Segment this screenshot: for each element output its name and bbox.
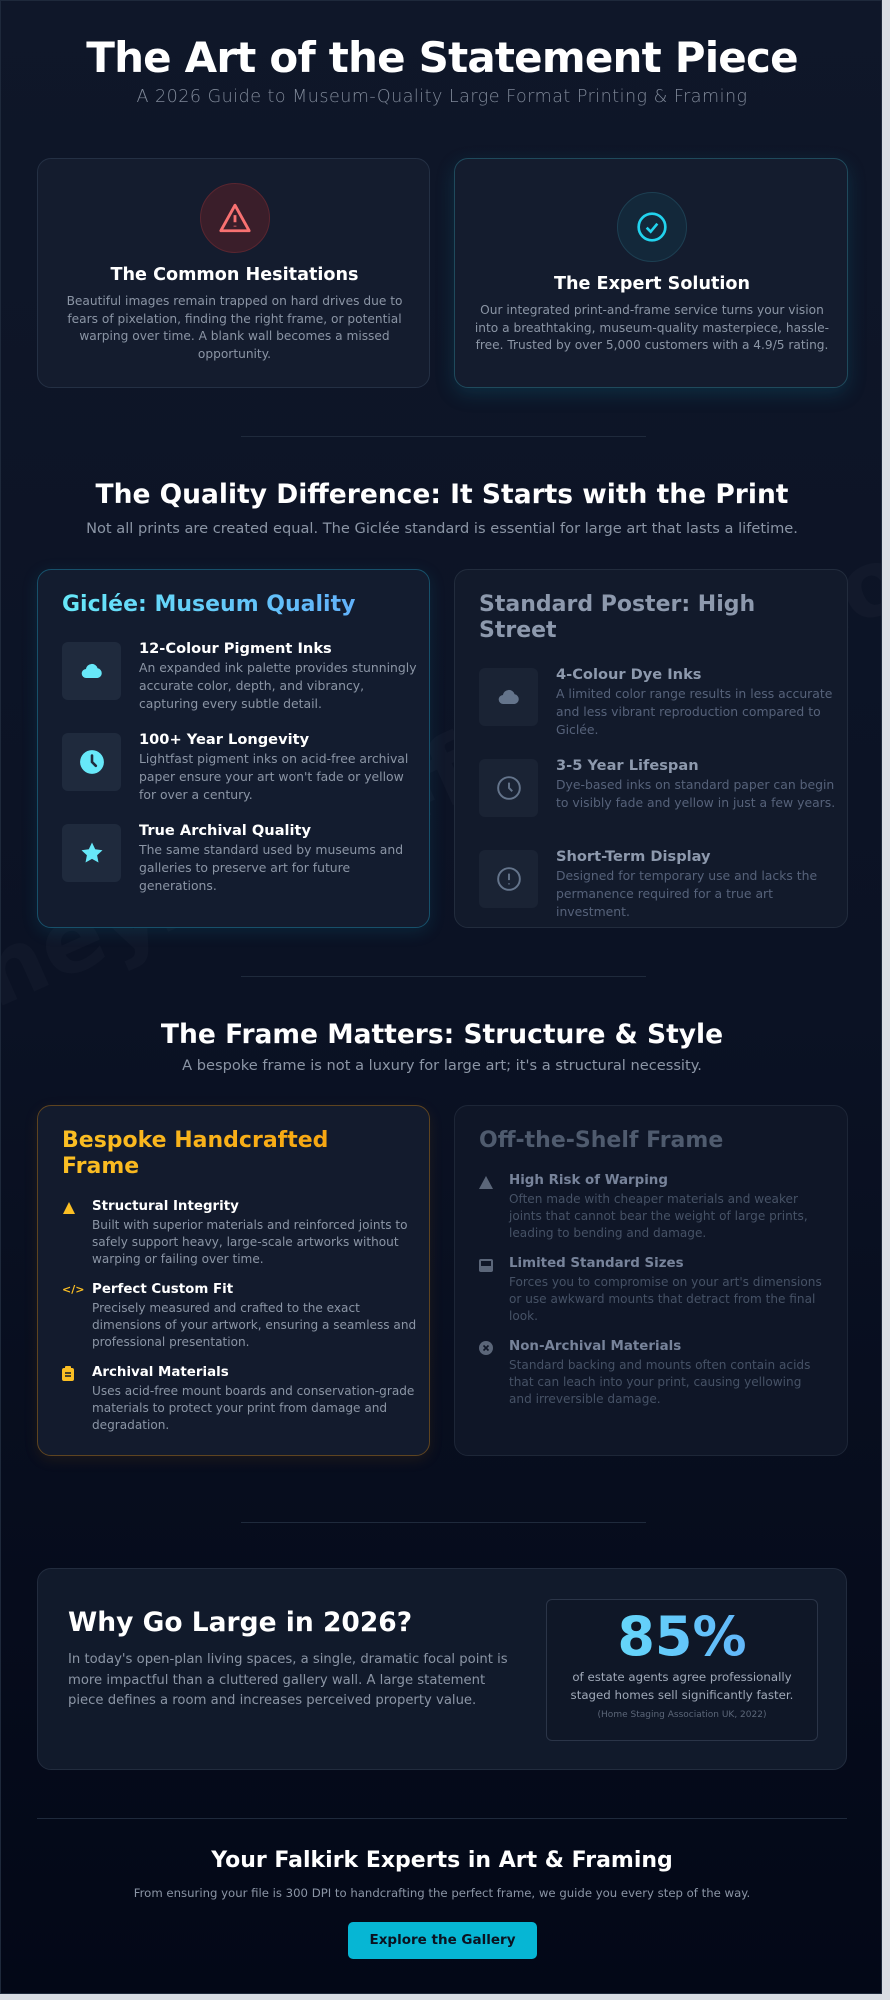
item: dye inks: A limited color range results in less accurate and less vibrant reproduction compared to Giclée. — [556, 686, 832, 737]
item: non-archival — [479, 1339, 810, 1406]
item: non-archival: Standard backing and mounts often contain acids that can leach into your print, causing yellowing and irreversible damage. — [509, 1358, 810, 1406]
item: lifespan — [479, 757, 835, 817]
panel: solution — [454, 158, 848, 388]
heading: quality: The Quality Difference: It Starts with the Print — [96, 479, 788, 510]
text: In today's open-plan living spaces, a single, dramatic focal point is more impactful than a cluttered gallery wall. A large statement piece defines a room and increases perceived property value. — [68, 1652, 508, 1708]
item: inks: 12-Colour Pigment Inks — [139, 640, 332, 657]
text: Our integrated print-and-frame service turns your vision into a breathtaking, museum-quality masterpiece, hassle-free. Trusted by over 5,000 customers with a 4.9/5 rating. — [475, 303, 829, 352]
item: sizes: Forces you to compromise on your art's dimensions or use awkward mounts that detract from the final look. — [509, 1275, 822, 1323]
panel: bespoke — [37, 1105, 430, 1456]
item: structural — [63, 1199, 408, 1266]
item: fit — [62, 1282, 416, 1349]
item: fit: Precisely measured and crafted to the exact dimensions of your artwork, ensuring a seamless and professional presentation. — [92, 1301, 416, 1349]
title: Off-the-Shelf Frame — [479, 1128, 723, 1153]
panel: why go large — [37, 1568, 847, 1770]
item: short-term — [479, 848, 817, 919]
item: materials: Uses acid-free mount boards and conservation-grade materials to protect your print from damage and degradation. — [92, 1384, 414, 1432]
heading: frame: The Frame Matters: Structure & Style — [161, 1019, 723, 1050]
heading: The Common Hesitations — [111, 265, 358, 285]
subtitle: A 2026 Guide to Museum-Quality Large Format Printing & Framing — [136, 87, 748, 107]
item: sizes: Limited Standard Sizes — [509, 1256, 684, 1271]
item: fit: </> — [62, 1283, 84, 1296]
item: inks: An expanded ink palette provides stunningly accurate color, depth, and vibrancy, capturing every subtle detail. — [139, 660, 417, 711]
subheading: quality: Not all prints are created equal. The Giclée standard is essential for large art that lasts a lifetime. — [86, 520, 798, 537]
item: structural: Built with superior materials and reinforced joints to safely support heavy, large-scale artworks without warping or failing over time. — [92, 1218, 408, 1266]
button: Explore the Gallery — [370, 1932, 516, 1948]
footer heading: Your Falkirk Experts in Art & Framing — [211, 1848, 673, 1873]
panel: off-the-shelf — [454, 1105, 848, 1456]
item: structural: Structural Integrity — [92, 1199, 239, 1214]
item: dye inks — [479, 666, 832, 737]
text: Beautiful images remain trapped on hard drives due to fears of pixelation, finding the right frame, or potential warping over time. A blank wall becomes a missed opportunity. — [67, 294, 402, 360]
icon: check — [617, 192, 687, 262]
stat number — [547, 1606, 817, 1668]
stat number: 85% — [617, 1605, 747, 1668]
panel: hesitations — [37, 158, 430, 388]
item: short-term: Short-Term Display — [556, 848, 711, 865]
item: materials — [62, 1365, 414, 1432]
item: warping — [479, 1173, 808, 1240]
item: short-term: Designed for temporary use and lacks the permanence required for a true art investment. — [556, 868, 817, 919]
icon: warning — [200, 183, 270, 253]
item: archival: True Archival Quality — [139, 822, 311, 839]
item: lifespan: Dye-based inks on standard paper can begin to visibly fade and yellow in just a few years. — [556, 777, 835, 810]
item: inks — [62, 640, 417, 711]
item: longevity: Lightfast pigment inks on acid-free archival paper ensure your art won't fade or yellow for over a century. — [139, 751, 408, 802]
item: dye inks: 4-Colour Dye Inks — [556, 666, 701, 683]
item: archival — [62, 822, 403, 893]
citation: (Home Staging Association UK, 2022) — [598, 1710, 766, 1720]
item: archival: The same standard used by museums and galleries to preserve art for future generations. — [139, 842, 403, 893]
panel: giclee — [37, 569, 430, 928]
item: fit: Perfect Custom Fit — [92, 1282, 233, 1297]
title: The Art of the Statement Piece — [86, 33, 798, 82]
item: sizes — [479, 1256, 822, 1323]
stat text: of estate agents agree professionally staged homes sell significantly faster. — [571, 1670, 793, 1702]
title: Bespoke Handcrafted Frame — [62, 1128, 328, 1179]
item: materials: Archival Materials — [92, 1365, 229, 1380]
subheading: frame: A bespoke frame is not a luxury for large art; it's a structural necessity. — [182, 1057, 702, 1074]
item: lifespan: 3-5 Year Lifespan — [556, 757, 699, 774]
item: longevity: 100+ Year Longevity — [139, 731, 309, 748]
title: Standard Poster: High Street — [479, 592, 755, 643]
heading: Why Go Large in 2026? — [68, 1607, 412, 1638]
item: longevity — [62, 731, 408, 802]
panel: standard poster — [454, 569, 848, 928]
item: warping: Often made with cheaper materials and weaker joints that cannot bear the weight of large prints, leading to bending and damage. — [509, 1192, 808, 1240]
footer text: From ensuring your file is 300 DPI to handcrafting the perfect frame, we guide you every step of the way. — [134, 1886, 750, 1900]
item: non-archival: Non-Archival Materials — [509, 1339, 681, 1354]
title: Giclée: Museum Quality — [62, 592, 355, 617]
heading: The Expert Solution — [554, 274, 750, 294]
callout: 85% stat — [546, 1599, 818, 1741]
item: warping: High Risk of Warping — [509, 1173, 668, 1188]
button — [348, 1922, 537, 1959]
